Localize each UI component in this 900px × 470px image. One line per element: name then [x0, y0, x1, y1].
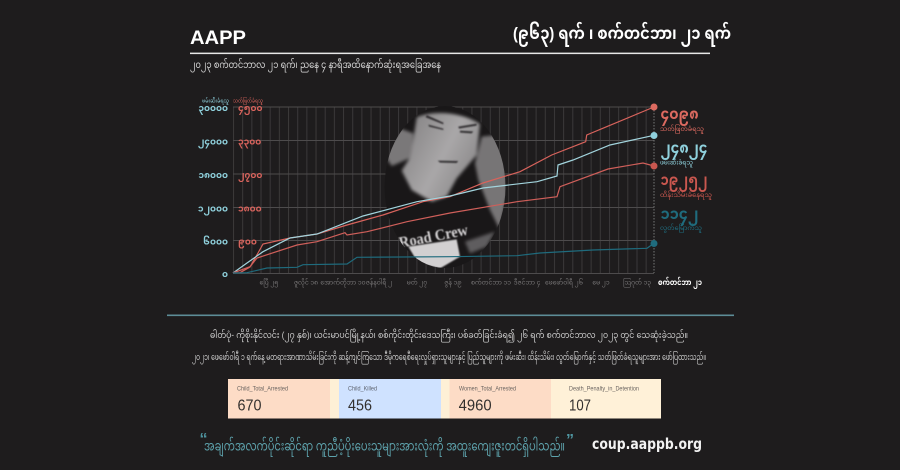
- left axis: arrested: ၆၀၀၀: [203, 236, 228, 246]
- x axis labels: စက်တင်ဘာ ၁၁: [471, 278, 511, 286]
- bandana left: [384, 128, 413, 166]
- data line: killed: [233, 107, 654, 273]
- title: AAPP: AAPP: [190, 27, 246, 49]
- left axis: killed: ၃၃၀၀: [238, 136, 261, 148]
- thanks quote: ”: [566, 432, 574, 449]
- card: women total arrested: [450, 379, 551, 418]
- card: women total arrested: Women_Total_Arrested: [459, 386, 516, 392]
- x axis labels: ဩဂုတ် ၁၃: [623, 278, 651, 288]
- subtitle: ၂၀၂၃ စက်တင်ဘာလ ၂၁ ရက်၊ ညနေ ၄ နာရီအထိနောက်ဆုံးရအခြေအနေ: [190, 58, 441, 72]
- series total: killed: ၄၀၉၈: [660, 106, 699, 126]
- x axis labels: မတ် ၂၇: [407, 278, 427, 288]
- data line: detained: [233, 163, 654, 273]
- card: women total arrested: 4960: [459, 398, 492, 414]
- x axis labels: ဧပြီ ၂၅: [260, 278, 278, 288]
- left axis: arrested: ၂၄၀၀၀: [198, 136, 228, 148]
- left axis: killed: ၉၀၀: [238, 236, 257, 248]
- caption text: ဓါတ်ပုံ- ကိုစိုးနိုင်လင်း (၂၇ နှစ်)၊ ယင်းမာပင်မြို့နယ်၊ စစ်ကိုင်းတိုင်းဒေသကြီး၊ ပစ်ခတ်ခြင်းခံရ၍ ၂၆ ရက် စက်တင်ဘာလ ၂၀၂၃ တွင် သေဆုံးခဲ့သည်။: [210, 328, 688, 342]
- portrait photo placeholder: [384, 106, 508, 268]
- series total: arrested: [660, 140, 708, 168]
- series total: released: ၁၁၄၂: [660, 206, 698, 226]
- series total: released: [660, 206, 702, 234]
- line chart: [198, 96, 712, 289]
- x axis end date: စက်တင်ဘာ ၂၁: [658, 276, 702, 289]
- left axis: arrested: ၀: [222, 269, 228, 279]
- eyes and mouth: [428, 125, 473, 163]
- face and neck: [402, 113, 480, 202]
- website: coup.aappb.org: [592, 435, 702, 453]
- left axis: arrested: [198, 103, 228, 279]
- left axis: killed: ၁၈၀၀: [238, 204, 262, 214]
- x axis labels: ဇန်နဝါရီ ၂: [366, 278, 392, 288]
- card: child total arrested: [228, 379, 330, 418]
- series total: detained: ၁၉၂၅၂: [660, 172, 708, 192]
- x axis labels: [260, 278, 651, 288]
- card: death penalty in detention: 107: [569, 398, 591, 414]
- shirt graphic: [408, 239, 460, 268]
- data line: released: [233, 243, 654, 273]
- card: child killed: [339, 379, 441, 418]
- card: child total arrested: Child_Total_Arrested: [237, 386, 288, 392]
- left axis legend: [202, 96, 263, 106]
- card: death penalty in detention: Death_Penalty_in_Detention: [569, 386, 639, 392]
- series total: killed: [660, 106, 704, 135]
- left axis: killed: ၄၅၀၀: [238, 103, 262, 115]
- x axis labels: ဇူလိုင် ၁၈: [294, 278, 318, 288]
- x axis labels: အောက်တိုဘာ ၁၀: [320, 278, 366, 288]
- thanks quote: “: [200, 431, 208, 448]
- data line: arrested: [233, 135, 654, 273]
- x axis labels: ဒီဇင်ဘာ ၄: [514, 278, 541, 288]
- x axis labels: မေ ၂၁: [592, 280, 610, 288]
- thanks quote: အချက်အလက်ပိုင်းဆိုင်ရာ ကူညီပံ့ပိုးပေးသူများအားလုံးကို အထူးကျေးဇူးတင်ရှိပါသည်။: [204, 436, 565, 458]
- series total: arrested: ၂၄၈၂၄: [660, 140, 708, 160]
- heading: day count and date: (၉၆၃) ရက် ၊ စက်တင်ဘာ၊ ၂၁ ရက်: [513, 21, 731, 47]
- left axis: arrested: ၃၀၀၀၀: [198, 103, 228, 115]
- thanks quote: [200, 431, 574, 458]
- series total: detained: ထိန်းသိမ်းခံနေရသူ: [660, 189, 712, 201]
- series total: arrested: ဖမ်းဆီးခံရသူ: [660, 156, 693, 168]
- left axis: arrested: ၁၈၀၀၀: [198, 170, 228, 180]
- series total: released: လွတ်မြောက်သူ: [660, 222, 702, 234]
- card: child killed: Child_Killed: [348, 386, 377, 392]
- x axis labels: ဇွန် ၁၉: [444, 278, 462, 288]
- x axis labels: ဖေဖော်ဝါရီ ၂၆: [545, 278, 584, 288]
- left axis: arrested: ၁၂၀၀၀: [198, 204, 228, 216]
- caption text: [192, 328, 706, 365]
- stat cards: [228, 379, 661, 418]
- series total: detained: [660, 172, 712, 201]
- left axis: killed: [238, 103, 262, 248]
- series total: killed: သတ်ဖြတ်ခံရသူ: [660, 123, 704, 135]
- left axis: killed: ၂၇၀၀: [238, 170, 262, 182]
- left axis legend: ဖမ်းဆီးခံရသူ: [202, 96, 229, 106]
- card: child total arrested: 670: [238, 398, 262, 414]
- card: child killed: 456: [348, 398, 372, 414]
- card: death penalty in detention: [560, 379, 661, 418]
- shirt lettering: Road Crew: [398, 222, 470, 252]
- end markers: [650, 104, 658, 247]
- hair right: [475, 135, 508, 230]
- left axis legend: သတ်ဖြတ်ခံရသူ: [233, 96, 263, 106]
